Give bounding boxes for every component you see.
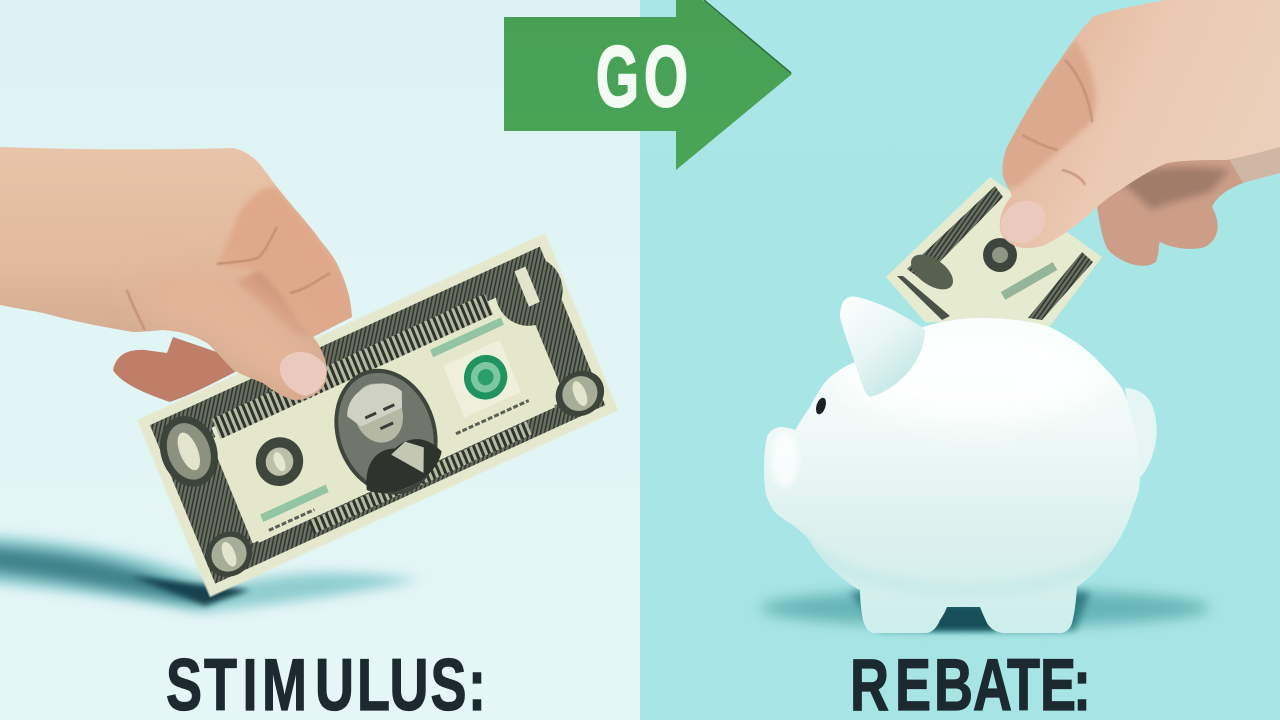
bill center field [210,296,566,543]
panel: stimulus background [0,0,640,720]
right hand outer fingers [1097,150,1243,266]
bill corner: top right [485,246,573,337]
right hand back fingers tone [1000,40,1096,190]
piggy bank [764,297,1157,633]
piggy left ear [840,297,925,397]
panel: rebate background [640,0,1280,720]
right thumbnail [1000,201,1045,243]
small bill paper [886,177,1102,326]
arrow text: O [644,29,688,125]
bill top lettering band [212,294,493,439]
left back finger [113,337,240,402]
bill portrait [316,352,456,512]
left hand finger creases [127,227,330,330]
bill corner: bottom left [199,524,259,585]
left thumbnail [280,352,326,396]
piggy eye [814,397,828,415]
bill serial number right [430,317,504,357]
small bill left oval [905,248,959,296]
small bill right band [1028,252,1093,320]
piggy body with snout and legs [764,318,1140,633]
bill corner: bottom right [549,363,611,424]
small bill green print [1003,266,1055,296]
small bill seal [983,238,1017,272]
bill left seal [249,429,310,494]
left hand upper finger [217,187,352,337]
arrow head shadow [704,0,791,73]
right wrist underside [1200,140,1280,195]
left hand palm and thumb [0,147,352,400]
hand: left holding bill [0,147,352,402]
piggy right ear [1125,388,1157,480]
piggy lower edge shade [809,540,1115,594]
bill ornate frame [150,247,605,584]
shadow: under piggy bank [760,589,1210,630]
dollar bill: large [137,233,618,597]
piggy highlights and shading [771,327,1120,596]
bill serial number left [260,485,329,522]
bill small print [265,400,533,530]
arrow text: G [596,29,639,125]
shadow: under dollar bill [0,535,420,612]
left hand shading overlays [163,186,352,400]
left thumb [163,280,327,400]
right hand palm and thumb [1000,0,1280,248]
bill bottom lettering band [308,421,532,534]
small bill lower left band [897,276,950,320]
right hand finger creases [1022,60,1092,185]
arrow: GO [504,0,792,170]
piggy body highlight [842,337,1110,418]
right hand finger gap shadow [1120,167,1230,210]
bill corner: top left [150,406,228,496]
bill green treasury seal [443,340,521,418]
arrow shape [504,0,792,170]
dollar bill: small [886,177,1102,326]
hand: right inserting bill [1000,0,1280,266]
small bill dark edge left [907,186,1003,280]
piggy snout highlight [771,432,799,488]
bill paper [137,233,618,597]
left hand middle finger shadow [238,270,306,334]
